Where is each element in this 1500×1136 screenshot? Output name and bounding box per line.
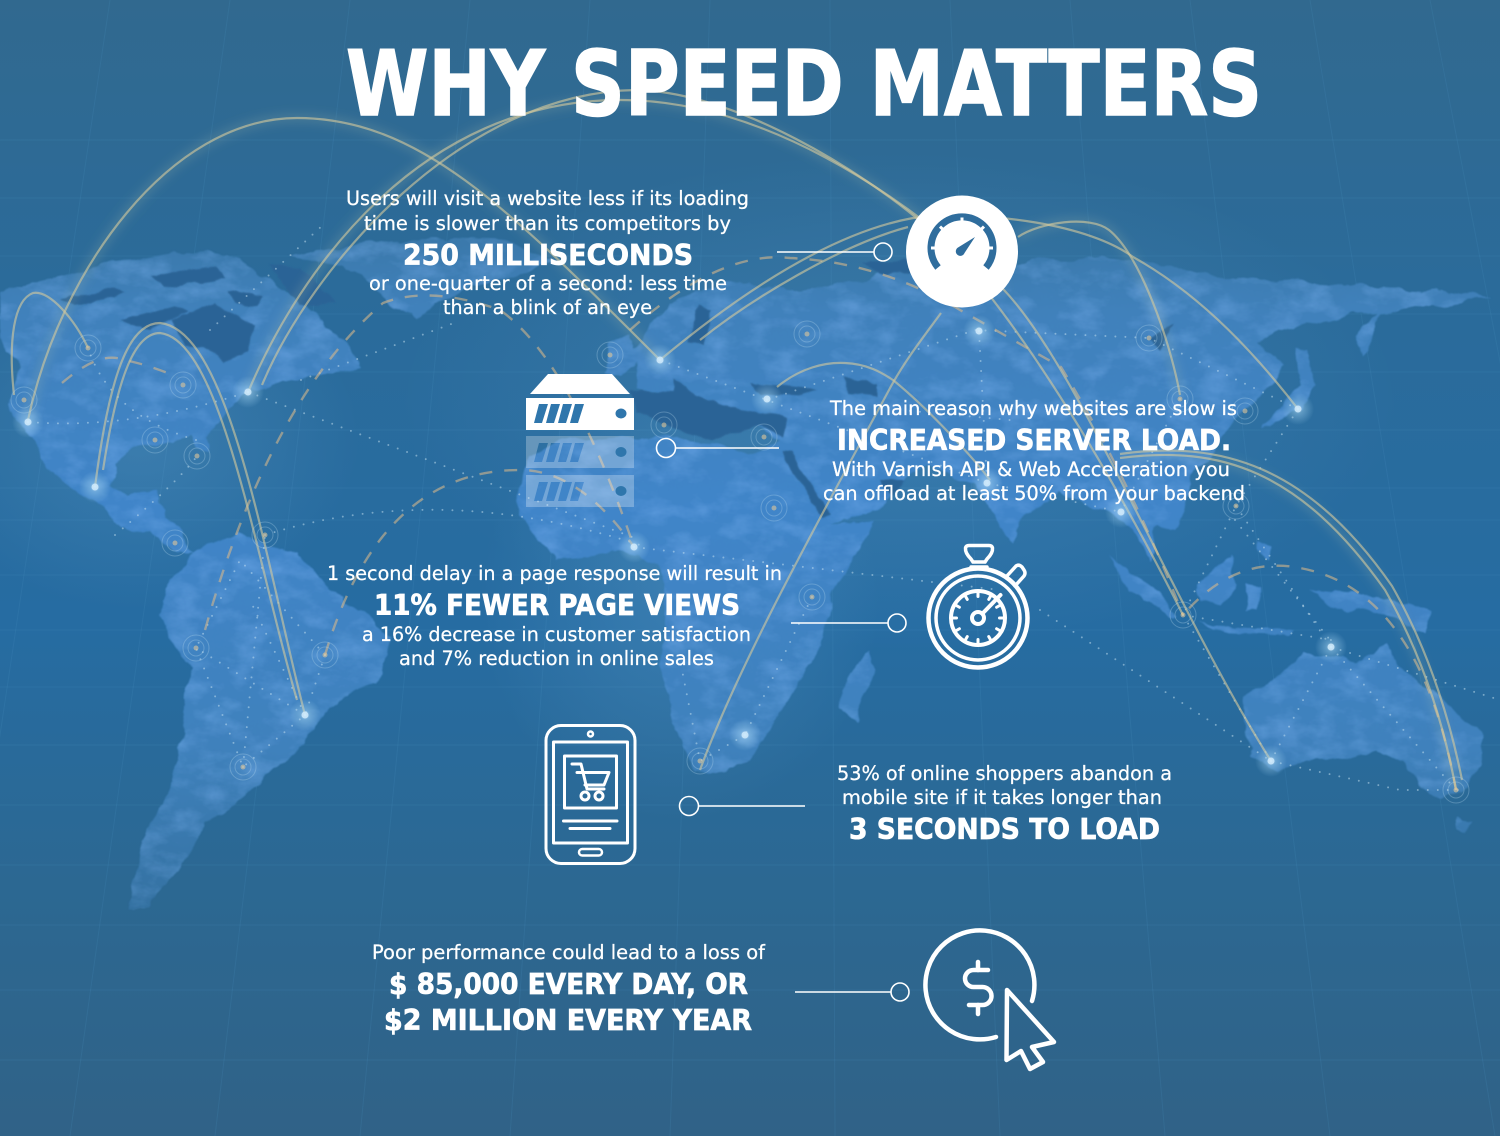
text block: page views — [327, 562, 782, 670]
text block: page views: 11% FEWER PAGE VIEWS — [374, 589, 740, 622]
text block: 250 milliseconds: than a blink of an eye — [443, 296, 652, 319]
connector: speed — [777, 243, 892, 261]
text block: money loss: $ 85,000 EVERY DAY, OR — [389, 968, 748, 1001]
connector: mobile — [680, 796, 805, 816]
text block: 250 milliseconds: Users will visit a website less if its loading — [346, 187, 749, 210]
connector: stopwatch — [791, 614, 906, 632]
icon: phone with cart — [546, 726, 635, 864]
title: WHY SPEED MATTERS — [346, 32, 1262, 137]
text block: money loss — [372, 941, 766, 1037]
server unit bottom — [526, 475, 634, 507]
text block: mobile — [837, 762, 1172, 846]
text block: money loss: Poor performance could lead to a loss of — [372, 941, 766, 964]
text block: 250 milliseconds: 250 MILLISECONDS — [403, 239, 693, 272]
land: greenland — [287, 237, 555, 320]
server unit top — [526, 374, 634, 430]
seas — [60, 258, 1175, 518]
connector: money — [795, 983, 909, 1001]
text block: server load: With Varnish API & Web Acceleration you — [832, 458, 1230, 481]
server unit middle — [526, 436, 634, 468]
icon: dollar and cursor — [925, 930, 1054, 1069]
land: eurasia and africa — [517, 258, 1491, 774]
arc lines — [28, 118, 660, 420]
icon: speedometer — [906, 196, 1018, 308]
land: australia — [1243, 643, 1482, 832]
connector: server — [656, 438, 779, 458]
icon: server stack — [526, 374, 634, 507]
text block: page views: and 7% reduction in online sales — [399, 647, 714, 670]
text block: money loss: $2 MILLION EVERY YEAR — [384, 1004, 752, 1037]
world map — [0, 150, 1491, 910]
land: kamchatka and japan — [1262, 310, 1381, 428]
text block: server load — [823, 397, 1245, 505]
land: britain — [605, 332, 635, 378]
icon: stopwatch — [928, 546, 1028, 668]
dotted routes — [28, 223, 1500, 790]
text block: 250 milliseconds: or one-quarter of a second: less time — [369, 272, 727, 295]
land: south america — [128, 533, 392, 910]
text block: mobile: 3 SECONDS TO LOAD — [849, 813, 1160, 846]
text block: 250 milliseconds: time is slower than its competitors by — [364, 212, 731, 235]
land: north america — [0, 250, 359, 552]
text block: server load: INCREASED SERVER LOAD. — [837, 424, 1231, 457]
network nodes — [11, 315, 1469, 803]
text block: server load: can offload at least 50% from your backend — [823, 482, 1245, 505]
text block: page views: 1 second delay in a page response will result in — [327, 562, 782, 585]
text block: server load: The main reason why websites are slow is — [829, 397, 1237, 420]
cart — [572, 764, 609, 789]
dashed routes — [62, 257, 1456, 790]
land: madagascar — [841, 651, 877, 723]
text block: mobile: mobile site if it takes longer than — [842, 786, 1162, 809]
text block: 250 milliseconds — [346, 187, 749, 319]
text block: mobile: 53% of online shoppers abandon a — [837, 762, 1172, 785]
text block: page views: a 16% decrease in customer satisfaction — [362, 623, 751, 646]
land: indonesia — [1109, 540, 1429, 636]
flight arcs — [12, 90, 1462, 790]
